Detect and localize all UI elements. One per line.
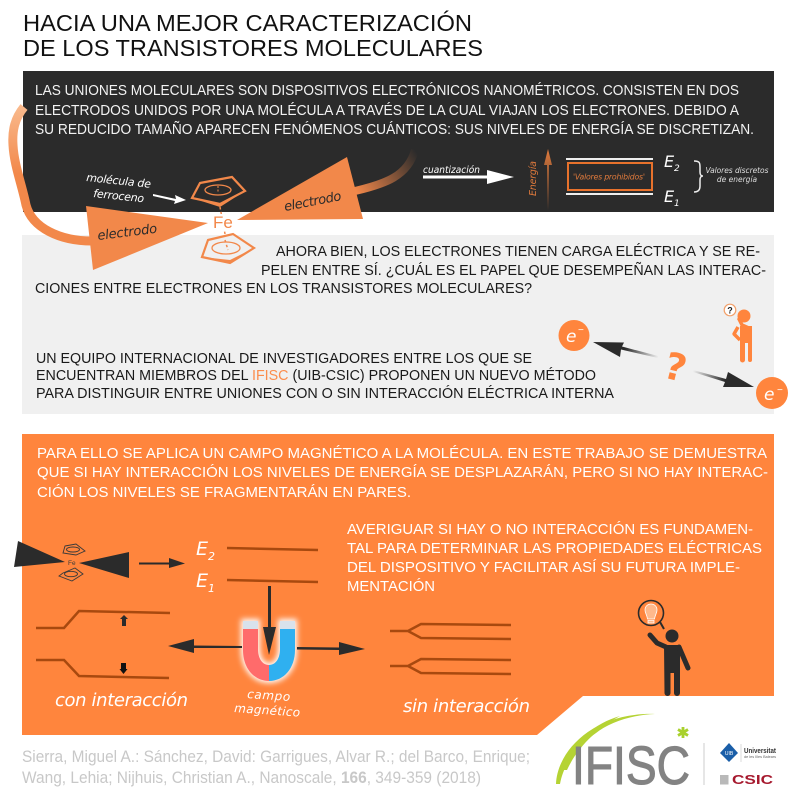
- label: discrete values: Valores discretos: [706, 166, 769, 175]
- logo: IFISC: [556, 714, 690, 796]
- diagram: energy levels: [36, 538, 530, 717]
- small ferrocene: [59, 544, 85, 581]
- arrow: to ferrocene: [153, 194, 186, 204]
- text: question: CIONES ENTRE ELECTRONES EN LOS TRANSISTORES MOLECULARES?: [35, 281, 532, 297]
- panel: orange method: [22, 434, 774, 735]
- electrode right: electrodo: [283, 189, 343, 215]
- arrow: quantization: [423, 170, 514, 184]
- label: campo magnético: campo: [247, 687, 291, 704]
- arrow: energy axis: [544, 149, 552, 210]
- electron bottom: −: [777, 385, 783, 396]
- diagram: electron repulsion: [558, 304, 788, 409]
- text: method: QUE SI HAY INTERACCIÓN LOS NIVELES DE ENERGÍA SE DESPLAZARÁN, PERO SI NO HAY INTERAC-: [37, 464, 768, 481]
- title: [23, 10, 483, 61]
- label: E1: 1: [208, 582, 215, 595]
- energy levels: E: [664, 187, 675, 206]
- arrow: left: [593, 342, 658, 358]
- label: con interacción: con interacción: [55, 690, 188, 711]
- energy levels: 'Valores prohibidos': [573, 172, 645, 182]
- diagram: molecular junction: [13, 107, 415, 270]
- level lines: [227, 548, 318, 582]
- energy levels: [566, 152, 680, 209]
- text: method: CIÓN LOS NIVELES SE FRAGMENTARÁN EN PARES.: [37, 484, 411, 501]
- electron top: e: [566, 327, 576, 347]
- electrode left: electrodo: [97, 222, 158, 244]
- logo: UIB: UIB: [725, 751, 734, 757]
- arrow: right to split: [297, 642, 365, 655]
- label: campo magnético: magnético: [234, 701, 301, 720]
- label: campo magnético: [234, 687, 301, 720]
- logo: UIB: de les Illes Balears: [744, 755, 776, 759]
- intro text: [35, 82, 754, 138]
- label: E1: [196, 570, 215, 595]
- icon: person with idea: [638, 600, 688, 696]
- arrow: down to magnet: [263, 586, 276, 655]
- label: E2: [196, 538, 215, 563]
- logo: CSIC: [720, 772, 774, 787]
- text: research team: [36, 351, 614, 402]
- electrodes dark: [14, 541, 129, 578]
- energy levels: E: [664, 152, 675, 171]
- intro text: SU REDUCIDO TAMAÑO APARECEN FENÓMENOS CUÁNTICOS: SUS NIVELES DE ENERGÍA SE DISCRETIZAN.: [35, 121, 754, 138]
- icon: thinking person: ?: [727, 306, 733, 316]
- electrode right: [237, 157, 363, 220]
- label: energía: Energía: [528, 161, 539, 196]
- electron bottom: e: [764, 385, 774, 405]
- text: importance: [347, 521, 762, 595]
- small ferrocene: Fe: [68, 560, 76, 567]
- label: cuantización: cuantización: [423, 165, 480, 176]
- diagram: small junction: [14, 541, 185, 581]
- label: E1: E: [196, 570, 208, 592]
- arrow: down: [120, 663, 128, 674]
- shifted levels: [36, 611, 170, 678]
- text: research team: UN EQUIPO INTERNACIONAL DE INVESTIGADORES ENTRE LOS QUE SE: [36, 351, 532, 367]
- text: question: AHORA BIEN, LOS ELECTRONES TIENEN CARGA ELÉCTRICA Y SE RE-: [276, 243, 760, 260]
- ferrocene molecule: [192, 177, 254, 263]
- intro text: LAS UNIONES MOLECULARES SON DISPOSITIVOS ELECTRÓNICOS NANOMÉTRICOS. CONSISTEN EN DOS: [35, 82, 739, 99]
- question mark: ?: [660, 344, 691, 391]
- electron top: −: [578, 325, 584, 336]
- text: importance: TAL PARA DETERMINAR LAS PROPIEDADES ELÉCTRICAS: [347, 540, 762, 557]
- text: research team: PARA DISTINGUIR ENTRE UNIONES CON O SIN INTERACCIÓN ELÉCTRICA INTERNA: [36, 385, 614, 402]
- arrow: right: [693, 370, 754, 387]
- text: importance: AVERIGUAR SI HAY O NO INTERACCIÓN ES FUNDAMEN-: [347, 521, 753, 538]
- logo: CSIC: CSIC: [732, 772, 774, 787]
- label: E2: E: [196, 538, 208, 560]
- title: DE LOS TRANSISTORES MOLECULARES: [23, 35, 483, 61]
- ferrocene molecule: Fe: [213, 213, 233, 232]
- energy levels: 1: [674, 199, 680, 209]
- panel: question grey: [22, 235, 774, 414]
- arrow: up: [120, 615, 128, 626]
- intro text: ELECTRODOS UNIDOS POR UNA MOLÉCULA A TRAVÉS DE LA CUAL VIAJAN LOS ELECTRONES. DEBIDO A: [35, 102, 739, 119]
- text: question: [35, 243, 766, 297]
- lead wire left: [13, 107, 92, 241]
- logo: UIB: Universitat: [744, 746, 776, 755]
- brace: discrete values: [694, 161, 703, 192]
- title: HACIA UNA MEJOR CARACTERIZACIÓN: [23, 10, 472, 36]
- label: discrete values: de energía: [717, 175, 758, 184]
- text: importance: DEL DISPOSITIVO Y FACILITAR ASÍ SU FUTURA IMPLE-: [347, 559, 740, 576]
- energy levels: 2: [674, 164, 680, 174]
- logo: UIB: [704, 743, 776, 785]
- electron top: [558, 320, 590, 351]
- arrow: left to shifted: [168, 639, 242, 653]
- label: ferrocene: molécula de: [86, 171, 152, 191]
- text: method: PARA ELLO SE APLICA UN CAMPO MAGNÉTICO A LA MOLÉCULA. EN ESTE TRABAJO SE DEMUESTRA: [37, 445, 767, 462]
- text: research team: ENCUENTRAN MIEMBROS DEL IFISC (UIB-CSIC) PROPONEN UN NUEVO MÉTODO: [36, 367, 596, 384]
- split levels: [390, 624, 511, 674]
- logo: IFISC: IFISC: [572, 736, 690, 796]
- label: sin interacción: sin interacción: [403, 696, 530, 717]
- label: ferrocene: [86, 171, 152, 205]
- citation: Wang, Lehia; Nijhuis, Christian A., Nanoscale, 166, 349-359 (2018): [22, 769, 481, 787]
- text: importance: MENTACIÓN: [347, 578, 435, 595]
- lead wire right: [355, 150, 415, 191]
- arrow: [139, 558, 185, 568]
- label: discrete values: [706, 166, 769, 184]
- electrode left: [86, 206, 208, 270]
- text: question: PELEN ENTRE SÍ. ¿CUÁL ES EL PAPEL QUE DESEMPEÑAN LAS INTERAC-: [261, 262, 766, 279]
- citation: Sierra, Miguel A.: Sánchez, David: Garrigues, Alvar R.; del Barco, Enrique;: [22, 748, 530, 766]
- icon: thinking person: [724, 304, 752, 362]
- diagram: quantization: [423, 149, 769, 210]
- panel: intro dark: [23, 71, 774, 212]
- label: E2: 2: [208, 550, 215, 563]
- text: method: [37, 445, 768, 501]
- icon: magnet: [243, 621, 295, 681]
- label: ferrocene: ferroceno: [93, 187, 145, 205]
- electron bottom: [756, 377, 788, 409]
- citation: [22, 748, 530, 787]
